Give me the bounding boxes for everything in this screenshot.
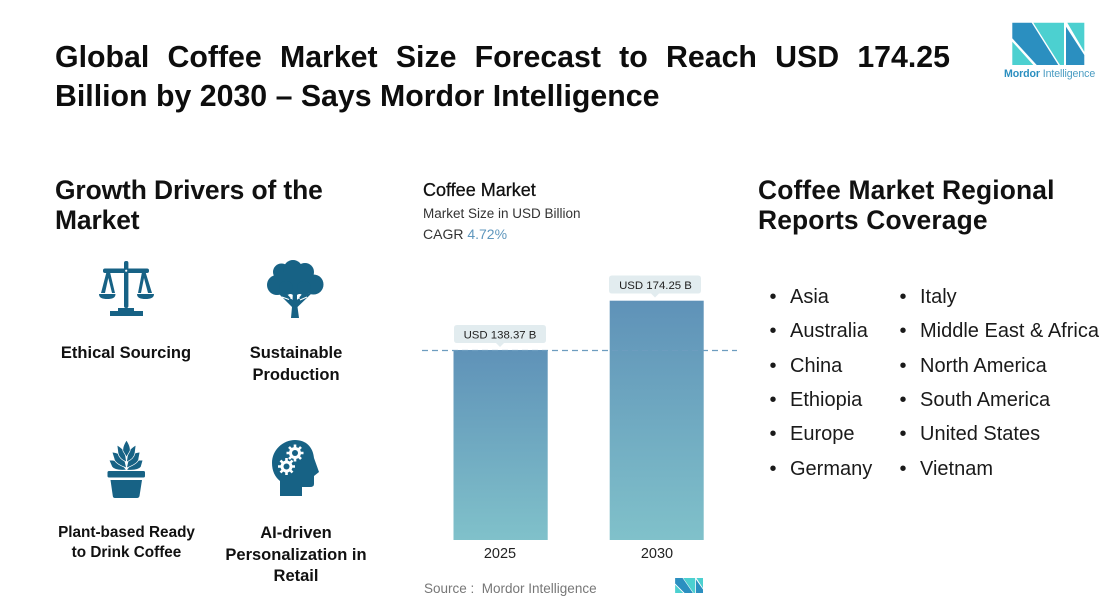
- text: •: [770, 355, 777, 377]
- text: •: [900, 389, 907, 411]
- chart subtitle: Market Size in USD Billion: [423, 206, 581, 221]
- text: •: [900, 286, 907, 308]
- list: regions column 2: Italy: [920, 286, 957, 308]
- heading: regional coverage: Reports Coverage: [758, 205, 988, 235]
- list: regions column 1: Ethiopia: [790, 389, 862, 411]
- list: regions column 2: Vietnam: [920, 458, 993, 480]
- logo: Mordor Intelligence: [1004, 22, 1095, 80]
- axis label: 2030: 2030: [641, 546, 673, 562]
- heading: growth drivers: [55, 175, 323, 235]
- list: regions column 2: United States: [920, 423, 1040, 445]
- logo: Mordor Intelligence: Mordor Intelligence: [1004, 68, 1095, 80]
- heading: regional coverage: Coffee Market Regional: [758, 175, 1055, 205]
- list: regions column 1: Australia: [790, 320, 868, 342]
- heading: growth drivers: Market: [55, 205, 139, 235]
- heading: regional coverage: [758, 175, 1055, 235]
- label: plant-based: to Drink Coffee: [72, 544, 181, 561]
- list: regions column 2: Middle East & Africa: [920, 320, 1099, 342]
- label: AI-driven: Personalization in: [225, 546, 367, 564]
- text: •: [900, 458, 907, 480]
- axis label: 2025: 2025: [484, 546, 516, 562]
- title: Global Coffee Market Size Forecast to Reach USD 174.25: [55, 41, 950, 74]
- label: AI-driven: Retail: [274, 567, 318, 585]
- text: •: [770, 423, 777, 445]
- icon: potted plant: [108, 440, 145, 498]
- source: Source : Mordor Intelligence: [424, 581, 597, 596]
- list: regions column 1: China: [790, 355, 842, 377]
- list: regions column 1: Asia: [790, 286, 829, 308]
- title: Billion by 2030 – Says Mordor Intelligence: [55, 80, 659, 113]
- bar chart: [422, 276, 737, 540]
- label: AI-driven: AI-driven: [260, 524, 332, 542]
- text: •: [770, 458, 777, 480]
- bar: 2025: [454, 350, 548, 540]
- list: regions column 1: Germany: [790, 458, 872, 480]
- title: [55, 41, 950, 113]
- label: AI-driven: [225, 524, 367, 585]
- list: regions column 2: North America: [920, 355, 1047, 377]
- text: •: [770, 389, 777, 411]
- icon: AI head with gears: [272, 440, 319, 496]
- label: sustainable production: Sustainable: [250, 344, 342, 362]
- small logo: [675, 578, 703, 593]
- text: •: [900, 355, 907, 377]
- chart heading: Coffee Market: [423, 180, 536, 200]
- text: •: [770, 320, 777, 342]
- icon: scales: [99, 261, 154, 316]
- value label: 2030: USD 174.25 B: [619, 280, 692, 292]
- value label: 2025: [454, 325, 546, 347]
- label: ethical sourcing: Ethical Sourcing: [61, 344, 191, 362]
- label: plant-based: [58, 524, 195, 561]
- value label: 2025: USD 138.37 B: [464, 330, 536, 342]
- label: sustainable production: Production: [252, 366, 340, 384]
- list: regions column 1: [770, 286, 872, 480]
- label: sustainable production: [250, 344, 342, 384]
- CAGR: CAGR 4.72%: [423, 226, 507, 242]
- label: plant-based: Plant-based Ready: [58, 524, 195, 541]
- icon: tree: [267, 260, 324, 318]
- bar: 2030: [610, 301, 704, 540]
- text: •: [900, 423, 907, 445]
- text: •: [900, 320, 907, 342]
- heading: growth drivers: Growth Drivers of the: [55, 175, 323, 205]
- list: regions column 2: [900, 286, 1099, 480]
- value label: 2030: [609, 276, 701, 298]
- list: regions column 2: South America: [920, 389, 1050, 411]
- text: •: [770, 286, 777, 308]
- list: regions column 1: Europe: [790, 423, 854, 445]
